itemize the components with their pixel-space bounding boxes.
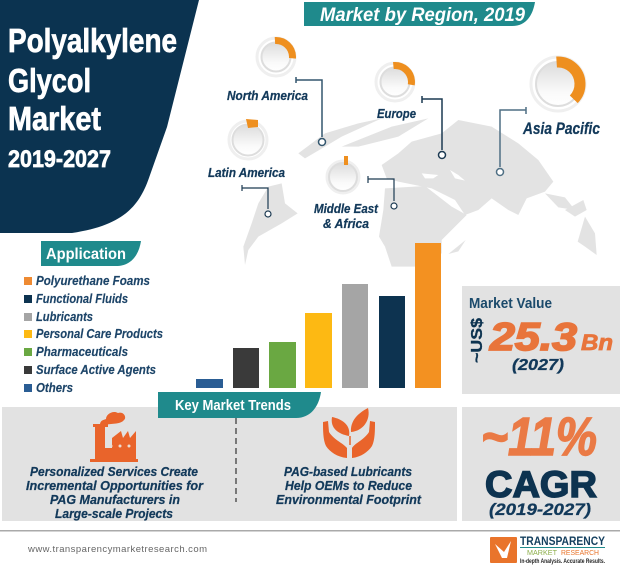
legend: Lubricants xyxy=(36,310,93,324)
title panel xyxy=(0,0,199,233)
leader: Asia Pacific xyxy=(496,107,526,176)
donut: Europe xyxy=(376,63,414,101)
heading: application xyxy=(41,241,141,266)
title: Glycol xyxy=(8,62,91,99)
text: trend 1: PAG Manufacturers in xyxy=(50,492,180,507)
donut: Latin America xyxy=(229,119,267,159)
panel: market value: ~US$ xyxy=(469,318,486,363)
leader: Middle East & Africa xyxy=(368,176,397,209)
legend: Functional Fluids xyxy=(36,292,128,306)
leader: Latin America xyxy=(242,185,271,217)
panel: market value: 25.3 xyxy=(489,316,577,359)
donut: Middle East & Africa xyxy=(327,156,359,193)
panel: market value: Market Value xyxy=(469,295,552,312)
text: trend 1: Personalized Services Create xyxy=(30,464,198,479)
leader: Europe xyxy=(422,96,446,158)
panel: CAGR: (2019-2027) xyxy=(489,500,591,519)
logo: RESEARCH xyxy=(561,548,599,557)
label: Middle East & Africa xyxy=(314,201,379,231)
panel: market value: (2027) xyxy=(512,357,564,374)
legend: Others xyxy=(36,381,73,395)
text: trend 1: Large-scale Projects xyxy=(55,506,173,521)
text: trend 2: Environmental Footprint xyxy=(276,492,422,507)
panel: CAGR: ~11% xyxy=(481,407,597,467)
bar chart xyxy=(196,243,441,388)
label: Asia Pacific: Asia Pacific xyxy=(522,120,600,138)
legend: Personal Care Products xyxy=(36,327,163,341)
world map xyxy=(243,118,597,267)
title: Polyalkylene xyxy=(8,22,177,59)
panel: key market trends xyxy=(2,407,457,521)
panel: market value xyxy=(462,286,620,394)
heading: market by region: Market by Region, 2019 xyxy=(320,5,525,26)
text: trend 2: Help OEMs to Reduce xyxy=(285,478,412,493)
label: Latin America: Latin America xyxy=(208,165,285,180)
title: 2019-2027 xyxy=(8,146,111,173)
logo: TRANSPARENCY xyxy=(520,536,605,548)
text: trend 1 xyxy=(26,464,204,521)
label: Middle East & Africa: Middle East xyxy=(314,201,379,216)
legend: Pharmaceuticals xyxy=(36,345,128,359)
legend: Surface Active Agents xyxy=(36,363,156,377)
leader: North America xyxy=(296,77,326,146)
text: trend 1: Incremental Opportunities for xyxy=(26,478,204,493)
icon: factory xyxy=(90,412,138,462)
panel: CAGR xyxy=(462,407,620,521)
title: Market xyxy=(8,100,101,137)
label: North America: North America xyxy=(227,88,308,103)
icon: plant in hands xyxy=(323,408,375,458)
website url: www.transparencymarketresearch.com xyxy=(27,544,207,555)
label: Europe: Europe xyxy=(377,106,416,121)
logo: MARKET xyxy=(527,548,557,557)
legend xyxy=(24,274,163,395)
heading: application: Application xyxy=(46,246,126,263)
legend: Polyurethane Foams xyxy=(36,274,150,288)
donut: North America xyxy=(257,38,295,76)
title xyxy=(8,22,177,173)
heading: key market trends: Key Market Trends xyxy=(175,397,291,414)
panel: market value: Bn xyxy=(581,330,613,355)
donut: Asia Pacific xyxy=(531,57,585,111)
panel: CAGR: CAGR xyxy=(485,464,597,505)
heading: key market trends xyxy=(158,392,321,418)
label: Middle East & Africa: & Africa xyxy=(323,216,369,231)
text: trend 2 xyxy=(276,464,422,507)
text: trend 2: PAG-based Lubricants xyxy=(284,464,412,479)
logo xyxy=(490,536,605,565)
